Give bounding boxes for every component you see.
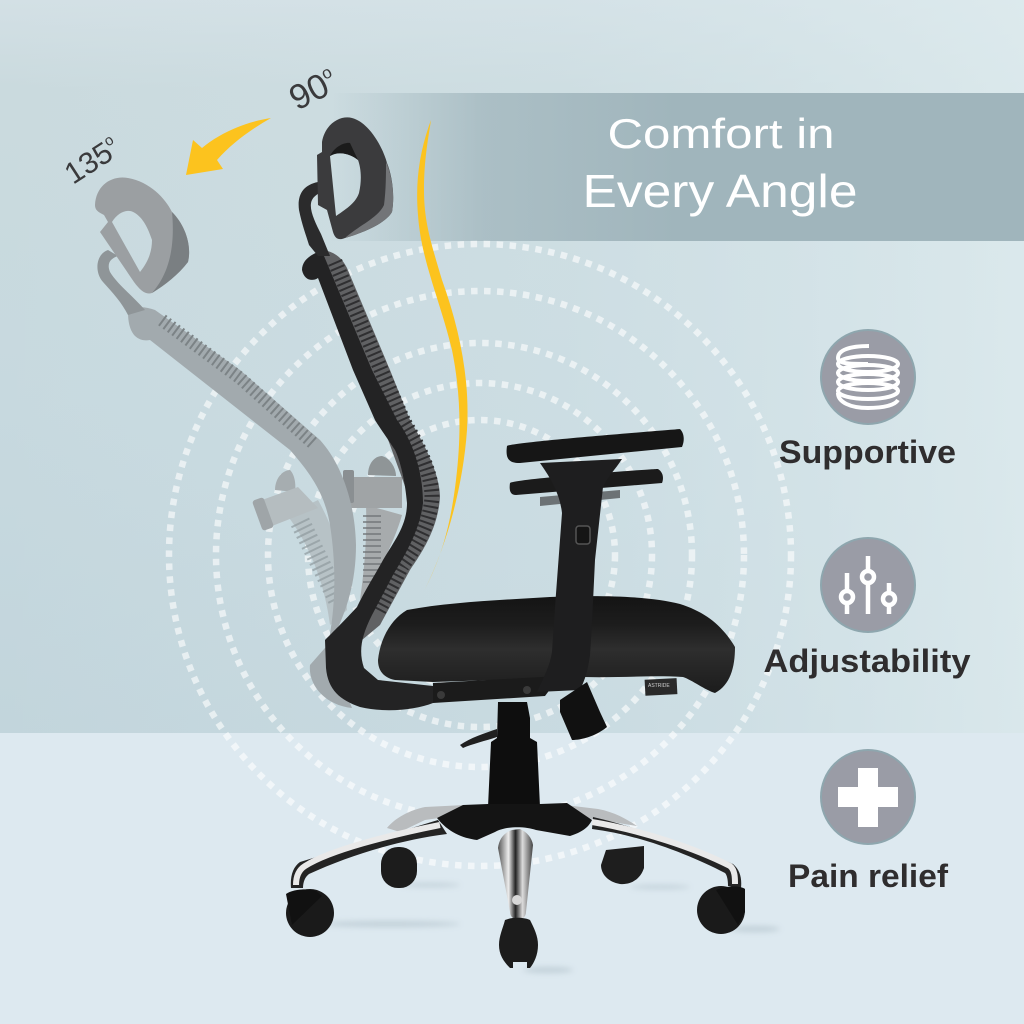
floor: [0, 733, 1024, 1024]
label: Supportive: [779, 434, 956, 470]
rear right caster: [601, 846, 644, 884]
armrest post: [537, 459, 622, 692]
front left caster: [286, 889, 334, 937]
base hub: [437, 803, 592, 840]
icon: plus: [821, 750, 915, 844]
wall background: [0, 0, 1024, 734]
seat cushion: [378, 596, 735, 693]
front caster: [499, 918, 538, 968]
chair upright: [286, 117, 780, 973]
lower armrest pad: [510, 469, 663, 495]
headrest inner shadow: [330, 143, 358, 160]
ghost fan detail: [275, 470, 295, 492]
feature: supportive: [779, 330, 956, 470]
ghost left arm: [262, 487, 318, 526]
gas lift cylinder: [488, 702, 540, 807]
ghost headrest: [95, 177, 189, 293]
label: 135 degrees: 135: [59, 136, 119, 191]
label: 90 degrees: 90: [283, 66, 335, 118]
ghost rear mesh panel: [360, 505, 402, 600]
mesh chevron texture: [335, 262, 432, 612]
ghost mesh texture: [162, 320, 315, 445]
armrest bracket: [540, 490, 620, 506]
headrest: [317, 117, 393, 239]
feature: adjustability: [764, 538, 971, 679]
seat underside mechanism: [433, 676, 560, 703]
backrest frame: [302, 252, 433, 710]
right base leg: [592, 817, 741, 888]
recline arrow: [186, 118, 271, 175]
rear base legs: [387, 805, 637, 832]
title: [582, 110, 858, 217]
upper armrest pad: [507, 429, 684, 463]
rear left caster: [381, 847, 417, 888]
ghost backrest: [128, 307, 356, 708]
front right caster: [697, 886, 745, 934]
label: 90 degrees: o: [318, 62, 335, 84]
title banner: [330, 93, 1024, 241]
neck bracket: [299, 182, 330, 256]
headrest mesh edge: [345, 162, 393, 238]
ghost lumbar mesh: [287, 500, 347, 625]
front base leg: [498, 829, 533, 920]
ghost fan detail upper: [368, 456, 396, 476]
yellow spine curve: [417, 120, 468, 591]
backrest mesh: [320, 250, 440, 640]
armrest button: [576, 526, 590, 544]
tilt knob: [560, 682, 607, 740]
icon: sliders: [821, 538, 915, 632]
brand tag: ASTRIDE: [648, 683, 670, 689]
label: Adjustability: [764, 643, 971, 679]
ghost headrest mesh edge: [152, 212, 189, 293]
label: Pain relief: [788, 858, 948, 894]
icon: spring: [821, 330, 915, 424]
left base leg: [291, 820, 447, 888]
chair reclined ghost at 135 degrees: [95, 177, 402, 708]
dotted concentric circles: [169, 244, 791, 866]
caster shadows: [320, 883, 780, 973]
title: Comfort in: [608, 110, 834, 157]
height lever: [460, 729, 497, 748]
ghost knob: [252, 497, 274, 531]
ghost back support arm: [343, 470, 402, 508]
label: 135 degrees: o: [101, 131, 117, 150]
title: Every Angle: [582, 165, 858, 217]
brand tag: [645, 678, 677, 696]
feature: pain relief: [788, 750, 948, 894]
ghost neck: [97, 250, 145, 315]
